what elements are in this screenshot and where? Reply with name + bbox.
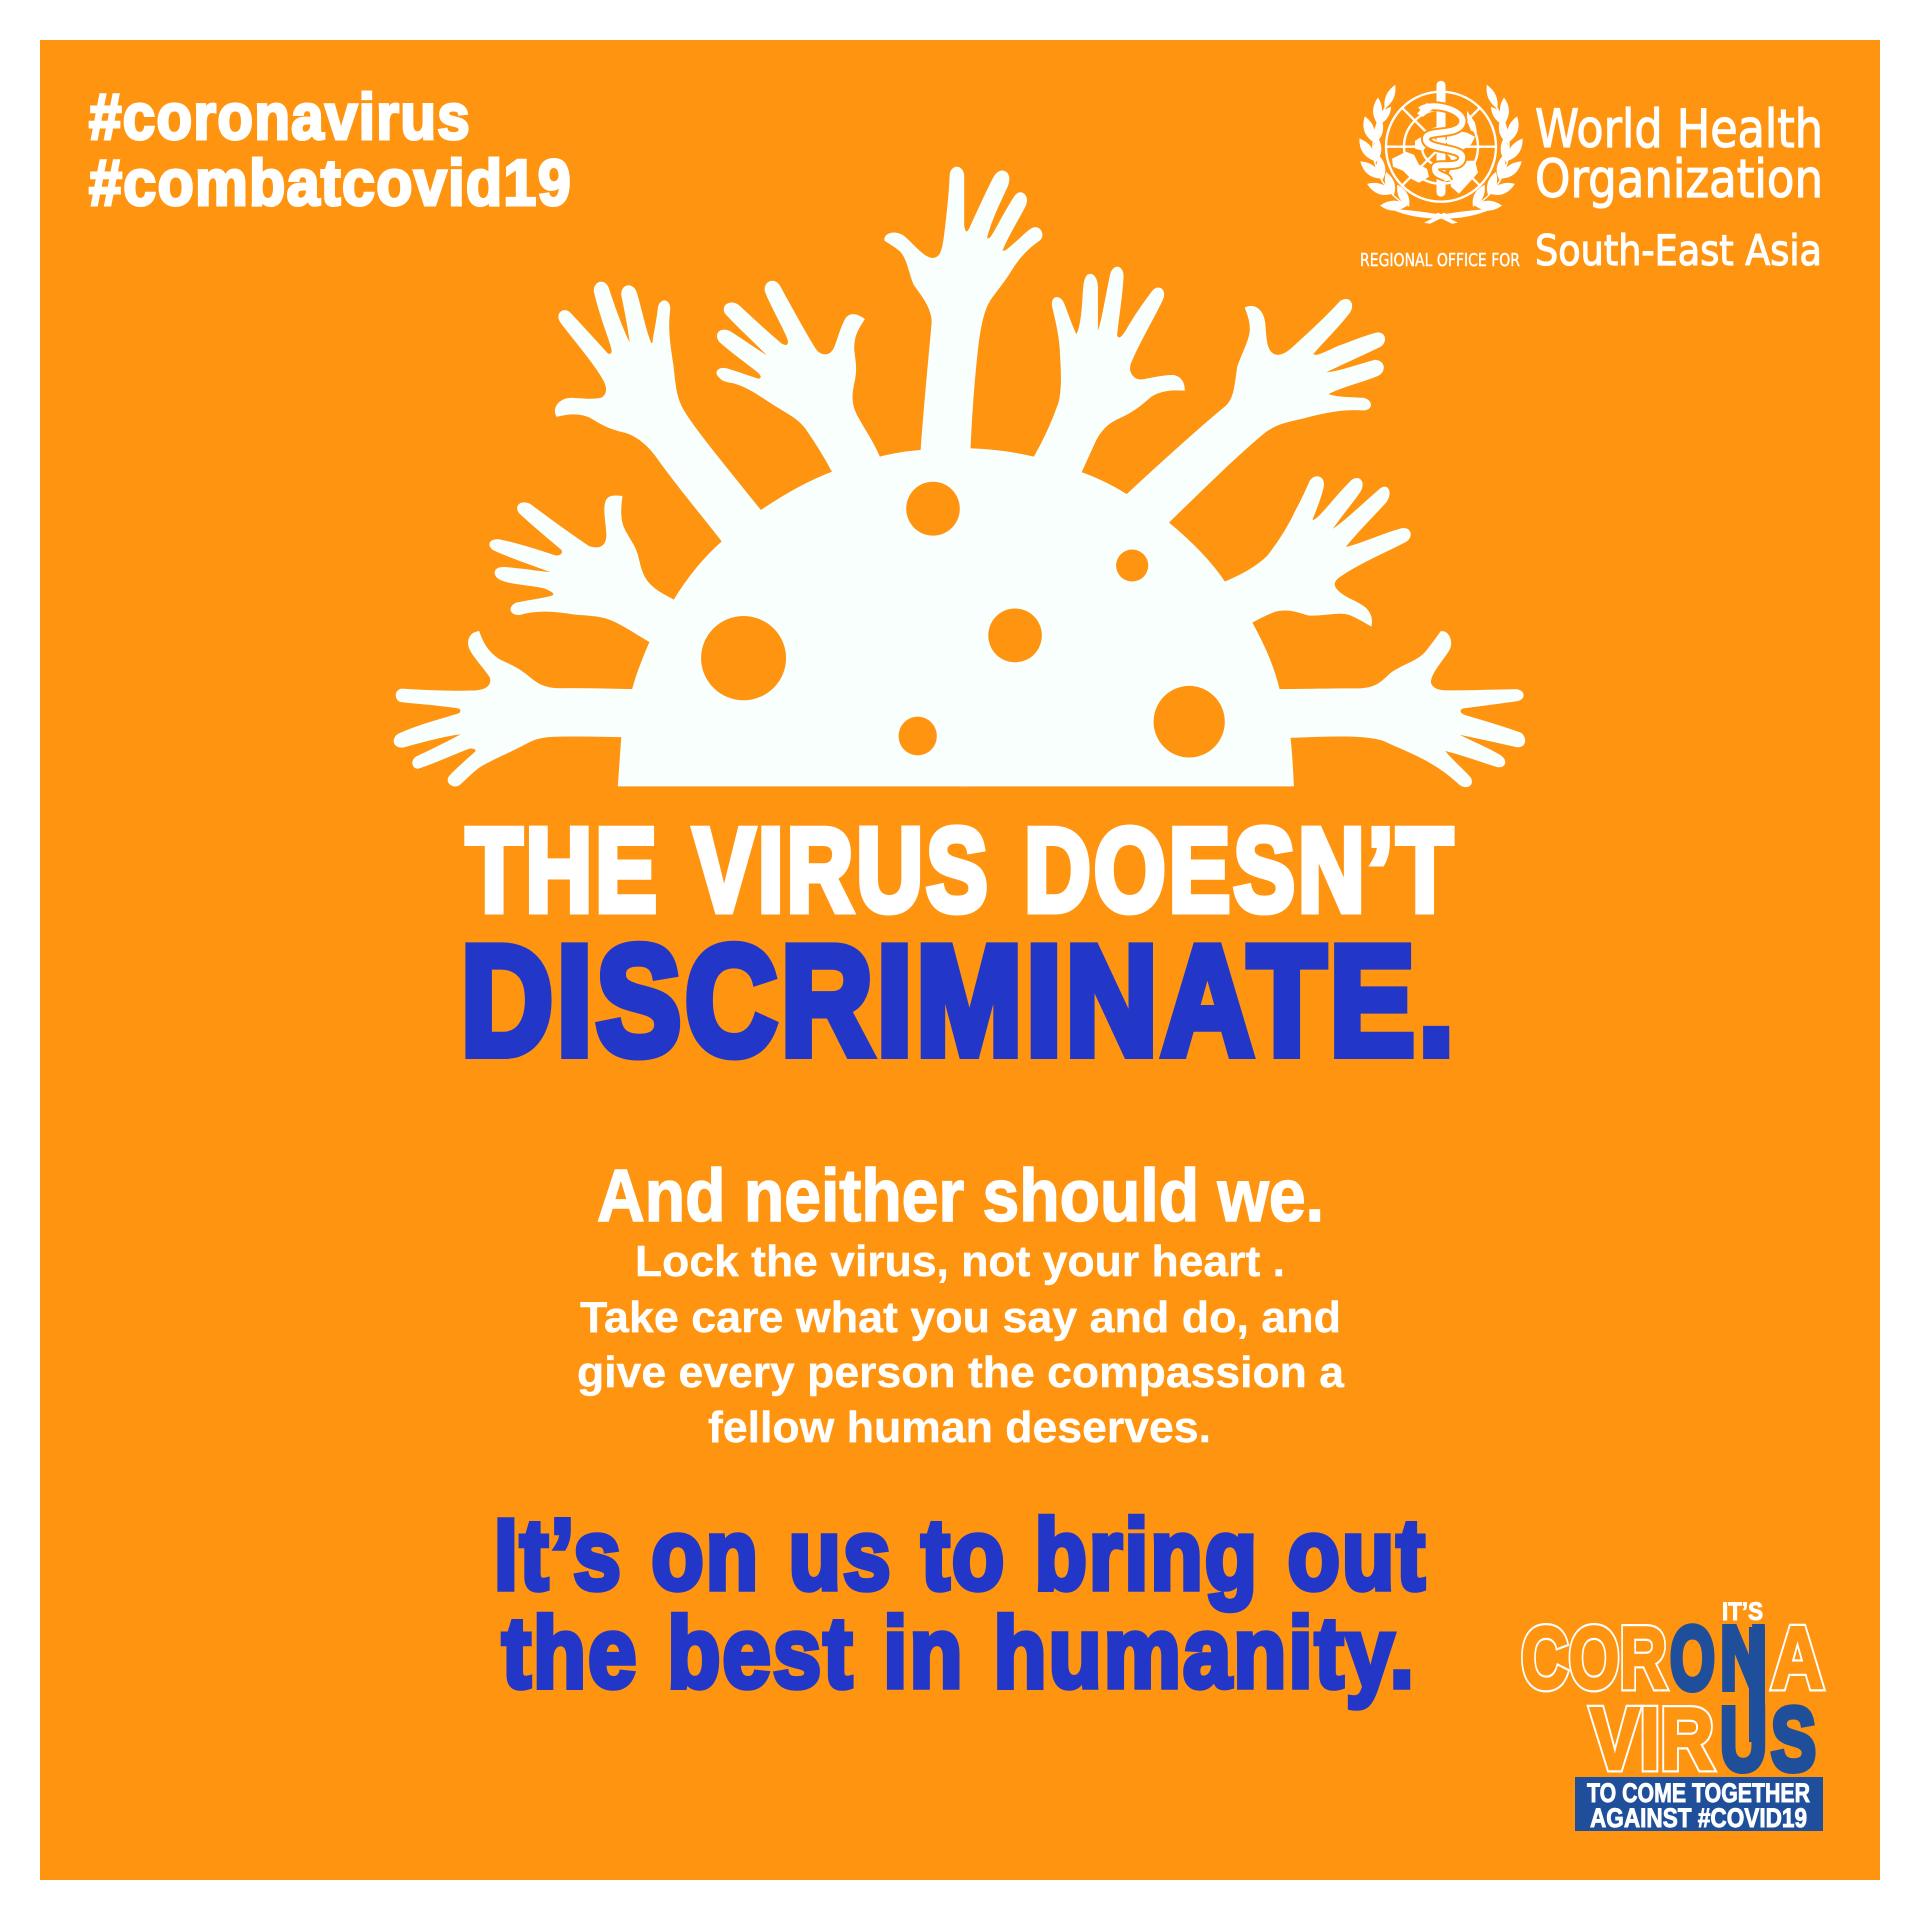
icon: WHO emblem — [1355, 81, 1527, 224]
WHO wordmark: Organization — [1535, 149, 1823, 210]
logo: It's on us campaign: O — [1670, 1609, 1715, 1709]
WHO wordmark: South-East Asia — [1535, 226, 1822, 275]
logo: It's on us campaign: COR — [1521, 1608, 1667, 1707]
subheading: And neither should we. — [597, 1154, 1324, 1237]
logo: It's on us campaign — [1521, 1598, 1824, 1833]
logo: It's on us campaign: S — [1771, 1690, 1816, 1790]
closing statement: It’s on us to bring out — [494, 1499, 1427, 1611]
WHO wordmark — [1360, 99, 1823, 275]
left half of virus with hands — [394, 167, 969, 786]
WHO wordmark: World Health — [1535, 99, 1823, 160]
logo: It's on us campaign: N — [1720, 1609, 1767, 1709]
WHO wordmark: REGIONAL OFFICE FOR — [1360, 250, 1520, 271]
hashtags — [89, 80, 572, 219]
hashtags: #combatcovid19 — [89, 146, 572, 219]
body text: Take care what you say and do, and — [580, 1293, 1341, 1342]
body text: fellow human deserves. — [708, 1403, 1211, 1452]
logo: It's on us campaign: AGAINST #COVID19 — [1590, 1803, 1807, 1833]
right half of virus with hands — [961, 171, 1525, 787]
logo: It's on us campaign: A — [1771, 1608, 1824, 1707]
body text — [577, 1237, 1345, 1452]
closing statement — [494, 1499, 1427, 1709]
illustration: virus half-sphere with hands as spikes — [394, 167, 1525, 787]
logo: It's on us campaign: U — [1720, 1690, 1767, 1790]
body text: give every person the compassion a — [577, 1348, 1345, 1397]
logo: It's on us campaign: VIR — [1590, 1689, 1714, 1788]
logo: It's on us campaign: TO COME TOGETHER — [1587, 1778, 1810, 1808]
logo: It's on us campaign: COR — [1521, 1608, 1667, 1707]
heading: discriminate: DISCRIMINATE. — [461, 914, 1458, 1087]
logo: It's on us campaign: VIR — [1590, 1689, 1714, 1788]
logo: It's on us campaign: IT’S — [1722, 1598, 1763, 1626]
hashtags: #coronavirus — [89, 80, 471, 153]
body text: Lock the virus, not your heart . — [635, 1237, 1285, 1286]
closing statement: the best in humanity. — [502, 1597, 1416, 1709]
heading: the virus doesn't: THE VIRUS DOESN’T — [466, 804, 1456, 937]
logo: It's on us campaign: A — [1771, 1608, 1824, 1707]
